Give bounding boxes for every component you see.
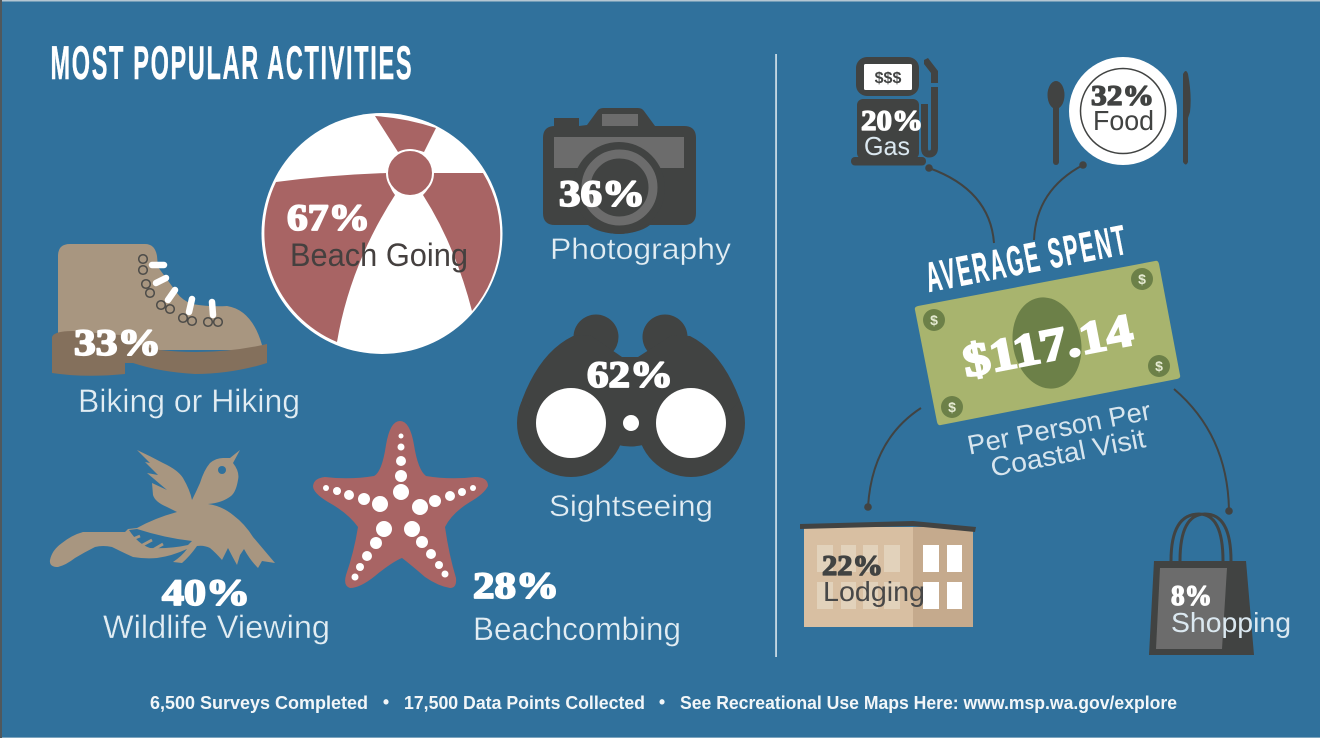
label: Beach Going [290,237,468,273]
icon: gas pump: $$$ [875,70,901,87]
percentage: 33% [74,323,161,364]
footer: • [659,692,665,712]
amount: $117.14 [958,304,1137,387]
percentage: 40% [162,573,250,614]
footer: 6,500 Surveys Completed [150,693,368,713]
icon: dollar bill: $ [1155,358,1163,374]
panel: sightseeing [517,314,745,523]
percentage: 67% [287,198,370,239]
label: Photography [550,233,731,266]
panel: photography [543,108,731,266]
panel: biking or hiking [52,244,300,419]
connector: shopping to bill [1174,389,1233,515]
footer [150,692,1177,713]
subtitle: Per Person Per [965,396,1153,460]
icon: bird [50,450,275,568]
icon: shopping bag [1149,514,1254,655]
icon: camera [543,108,696,234]
panel: wildlife viewing [50,450,330,645]
percentage: 20% [861,106,923,137]
connector: lodging to bill [864,408,921,511]
icon: hiking boot [52,244,267,376]
panel: gas [851,57,938,166]
percentage: 8% [1171,581,1212,612]
subtitle: Coastal Visit [988,423,1148,483]
percentage: 22% [822,551,883,582]
heading: AVERAGE SPENT [922,217,1130,302]
panel: lodging [800,521,976,627]
icon: building [800,521,976,627]
label: Lodging [823,576,925,607]
icon: dollar bill: $ [930,312,938,328]
icon: dollar bill: $ [1138,271,1146,287]
label: Food [1093,105,1154,136]
percentage: 32% [1091,81,1154,112]
connector: gas to bill [925,164,994,243]
footer: See Recreational Use Maps Here: www.msp.wa.gov/explore [680,693,1177,713]
label: Shopping [1171,607,1291,638]
panel: beachcombing [313,421,681,647]
footer: • [383,692,389,712]
panel: average spent [915,217,1180,483]
panel: shopping [1149,514,1291,655]
icon: dollar bill [915,261,1180,425]
footer: 17,500 Data Points Collected [404,693,645,713]
label: Biking or Hiking [78,383,300,419]
connector: food to bill [1034,161,1087,240]
panel: food [1048,57,1191,165]
panel: beach going [262,113,502,354]
icon: plate and cutlery [1048,57,1191,165]
label: Beachcombing [473,611,681,647]
percentage: 28% [473,566,559,607]
percentage: 62% [587,355,673,396]
percentage: 36% [559,174,645,215]
icon: binoculars [517,314,745,477]
icon: dollar bill: $ [948,399,956,415]
icon: beach ball [262,113,502,354]
title: MOST POPULAR ACTIVITIES [50,36,412,89]
label: Gas [864,131,910,161]
icon: starfish [313,421,488,588]
label: Sightseeing [549,490,713,523]
label: Wildlife Viewing [103,609,330,645]
